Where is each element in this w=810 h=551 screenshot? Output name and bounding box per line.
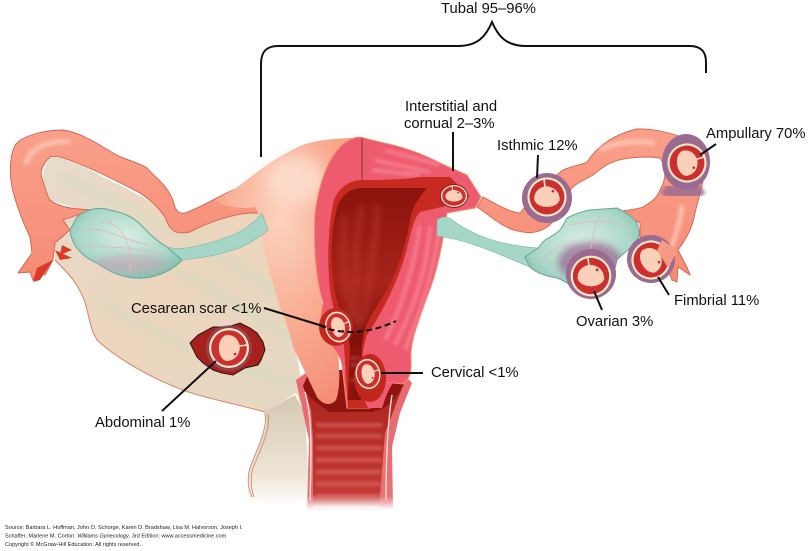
uterus body peach outer surface bbox=[215, 138, 360, 404]
label: cervical: Cervical <1% bbox=[431, 365, 519, 381]
label: ampullary bbox=[700, 126, 806, 155]
abdominal pregnancy sac bbox=[190, 323, 265, 375]
cesarean scar pregnancy sac bbox=[319, 308, 354, 346]
ovarian pregnancy sac bbox=[566, 249, 616, 299]
label: interstitial and cornual bbox=[404, 99, 497, 171]
label: fimbrial bbox=[658, 277, 759, 309]
left ovary and ligament bbox=[70, 208, 268, 278]
cervical pregnancy sac bbox=[353, 354, 386, 402]
source credit bbox=[5, 525, 243, 548]
lower beige tissue bbox=[248, 395, 310, 505]
left fallopian tube bbox=[10, 130, 280, 282]
vagina bbox=[296, 370, 412, 510]
label: cesarean scar: Cesarean scar <1% bbox=[131, 301, 261, 317]
fimbrial pregnancy sac bbox=[624, 233, 678, 287]
endometrium and uterine cavity bbox=[328, 177, 470, 408]
label: abdominal: Abdominal 1% bbox=[95, 415, 190, 431]
broad ligament tissue bbox=[43, 157, 305, 413]
tubal bracket bbox=[261, 22, 706, 157]
source credit: Schaffer, Marlene M. Corton: Williams Gynecology, 3rd Edition: www.accessmedicine.com bbox=[5, 534, 227, 540]
label: isthmic: Isthmic 12% bbox=[497, 138, 578, 154]
label: interstitial and cornual: cornual 2–3% bbox=[404, 116, 494, 132]
right ovary bbox=[525, 208, 639, 293]
right fallopian tube bbox=[477, 129, 705, 282]
label: isthmic bbox=[497, 138, 578, 178]
label: cervical bbox=[381, 365, 519, 381]
uterus cut section: myometrium bbox=[314, 137, 481, 408]
interstitial pregnancy sac bbox=[440, 184, 468, 208]
isthmic pregnancy sac bbox=[522, 173, 572, 223]
label: ovarian: Ovarian 3% bbox=[576, 314, 653, 330]
label: ampullary: Ampullary 70% bbox=[706, 126, 806, 142]
label: cesarean scar bbox=[131, 301, 396, 332]
source credit: Source: Barbara L. Hoffman, John O. Schorge, Karen D. Bradshaw, Lisa M. Halvorson, Joseph I. bbox=[5, 525, 243, 531]
right ligament bbox=[437, 217, 538, 267]
label: fimbrial: Fimbrial 11% bbox=[674, 293, 759, 309]
ampullary pregnancy sac bbox=[662, 134, 710, 194]
source credit: Copyright © McGraw-Hill Education. All rights reserved. bbox=[5, 541, 141, 548]
label: abdominal bbox=[95, 361, 216, 431]
label: tubal: Tubal 95–96% bbox=[441, 1, 536, 17]
label: interstitial and cornual: Interstitial and bbox=[405, 99, 497, 115]
label: ovarian bbox=[576, 291, 653, 330]
